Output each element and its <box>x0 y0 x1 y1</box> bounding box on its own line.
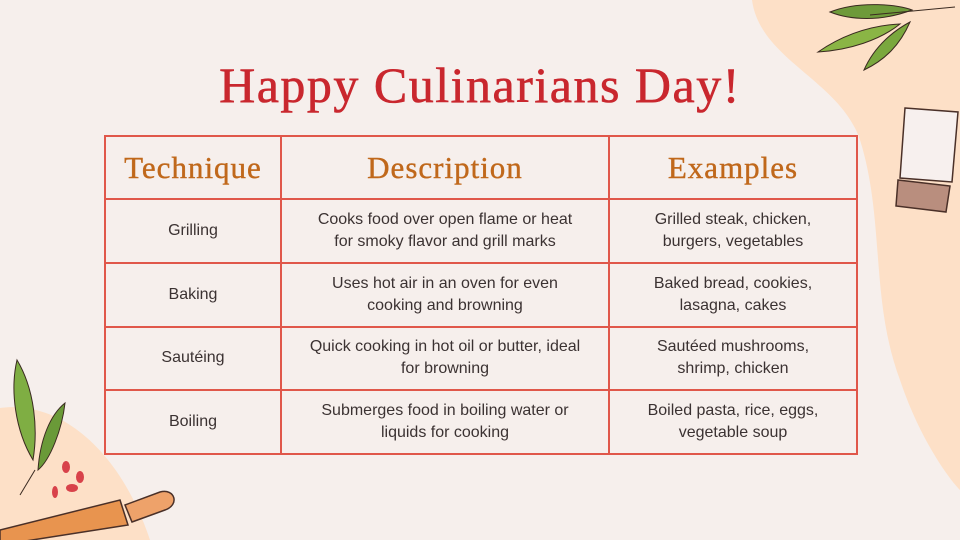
icon: seeds <box>52 461 84 498</box>
table: Boiled pasta, rice, eggs, <box>648 402 818 419</box>
icon: salt shaker <box>896 108 958 212</box>
table: liquids for cooking <box>381 424 509 441</box>
table: Cooks food over open flame or heat <box>318 211 572 228</box>
title: Happy Culinarians Day! <box>219 57 741 113</box>
table: Examples <box>668 150 798 184</box>
table: Description <box>367 150 523 184</box>
table: for smoky flavor and grill marks <box>334 233 556 250</box>
table: lasagna, cakes <box>680 297 786 314</box>
table: burgers, vegetables <box>663 233 803 250</box>
table: Technique <box>124 150 262 184</box>
table: Grilled steak, chicken, <box>655 211 811 228</box>
table: Sautéed mushrooms, <box>657 338 809 355</box>
table: Sautéing <box>161 349 225 366</box>
table <box>104 135 858 455</box>
icon: leaves bottom left <box>14 360 65 495</box>
icon: rolling pin <box>0 491 174 540</box>
table: shrimp, chicken <box>677 360 789 377</box>
table: for browning <box>401 360 489 377</box>
table: cooking and browning <box>367 297 523 314</box>
icon: leaves top right <box>818 5 955 70</box>
table: Submerges food in boiling water or <box>321 402 569 419</box>
table: Baking <box>169 286 217 303</box>
table: Uses hot air in an oven for even <box>332 275 558 292</box>
table: Baked bread, cookies, <box>654 275 812 292</box>
table: Boiling <box>169 413 217 430</box>
table: Quick cooking in hot oil or butter, ideal <box>310 338 580 355</box>
table: vegetable soup <box>679 424 787 441</box>
table: Grilling <box>168 222 218 239</box>
